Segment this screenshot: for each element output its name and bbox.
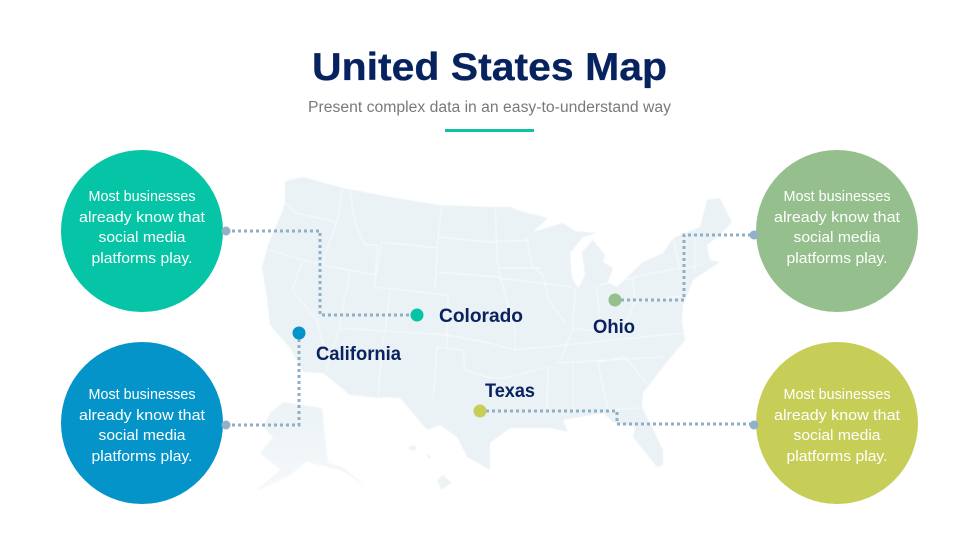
marker: California bbox=[292, 326, 306, 340]
panel: top-left circle: already know that bbox=[79, 209, 206, 226]
panel: bottom-right circle: social media bbox=[794, 427, 881, 444]
label: California: California bbox=[316, 344, 401, 365]
panel: top-left circle: Most businesses bbox=[88, 188, 196, 205]
panel: top-left circle: social media bbox=[98, 229, 186, 246]
map: state borders bbox=[268, 188, 708, 412]
panel: bottom-right circle: platforms play. bbox=[786, 448, 888, 465]
connector: Ohio bbox=[621, 235, 750, 300]
label: Colorado: Colorado bbox=[439, 306, 523, 327]
map of the United States bbox=[253, 177, 732, 493]
marker: Texas bbox=[474, 404, 486, 418]
marker: Colorado bbox=[410, 308, 424, 322]
label: Ohio: Ohio bbox=[593, 317, 635, 338]
label: Texas: Texas bbox=[485, 381, 535, 402]
panel: top-right circle: platforms play. bbox=[786, 250, 888, 267]
map: contiguous states bbox=[262, 177, 732, 470]
panel: bottom-right circle bbox=[756, 342, 918, 504]
map: Hawaii bbox=[408, 445, 452, 490]
panel: top-right circle: social media bbox=[794, 229, 881, 246]
subtitle: Present complex data in an easy-to-understand way bbox=[308, 99, 671, 116]
panel: top-left circle bbox=[61, 150, 223, 312]
panel: bottom-left circle: already know that bbox=[79, 407, 206, 424]
panel: bottom-left circle: social media bbox=[98, 427, 186, 444]
connector: Colorado bbox=[232, 231, 411, 315]
connector: Texas bbox=[486, 411, 750, 424]
panel: top-left circle: platforms play. bbox=[92, 250, 192, 267]
panel: bottom-right circle: Most businesses bbox=[784, 386, 890, 403]
map: Alaska bbox=[253, 402, 367, 493]
panel: top-right circle: already know that bbox=[774, 209, 901, 226]
panel: bottom-left circle: platforms play. bbox=[92, 448, 192, 465]
panel: bottom-left circle: Most businesses bbox=[88, 386, 196, 403]
panel: bottom-right circle: already know that bbox=[774, 407, 901, 424]
panel: bottom-left circle bbox=[61, 342, 223, 504]
connector: California bbox=[232, 339, 299, 425]
panel: top-right circle: Most businesses bbox=[784, 188, 890, 205]
title: United States Map bbox=[312, 46, 667, 89]
connector end dots bbox=[222, 226, 758, 430]
marker: Ohio bbox=[608, 294, 622, 306]
panel: top-right circle bbox=[756, 150, 918, 312]
title underline bbox=[445, 129, 534, 132]
